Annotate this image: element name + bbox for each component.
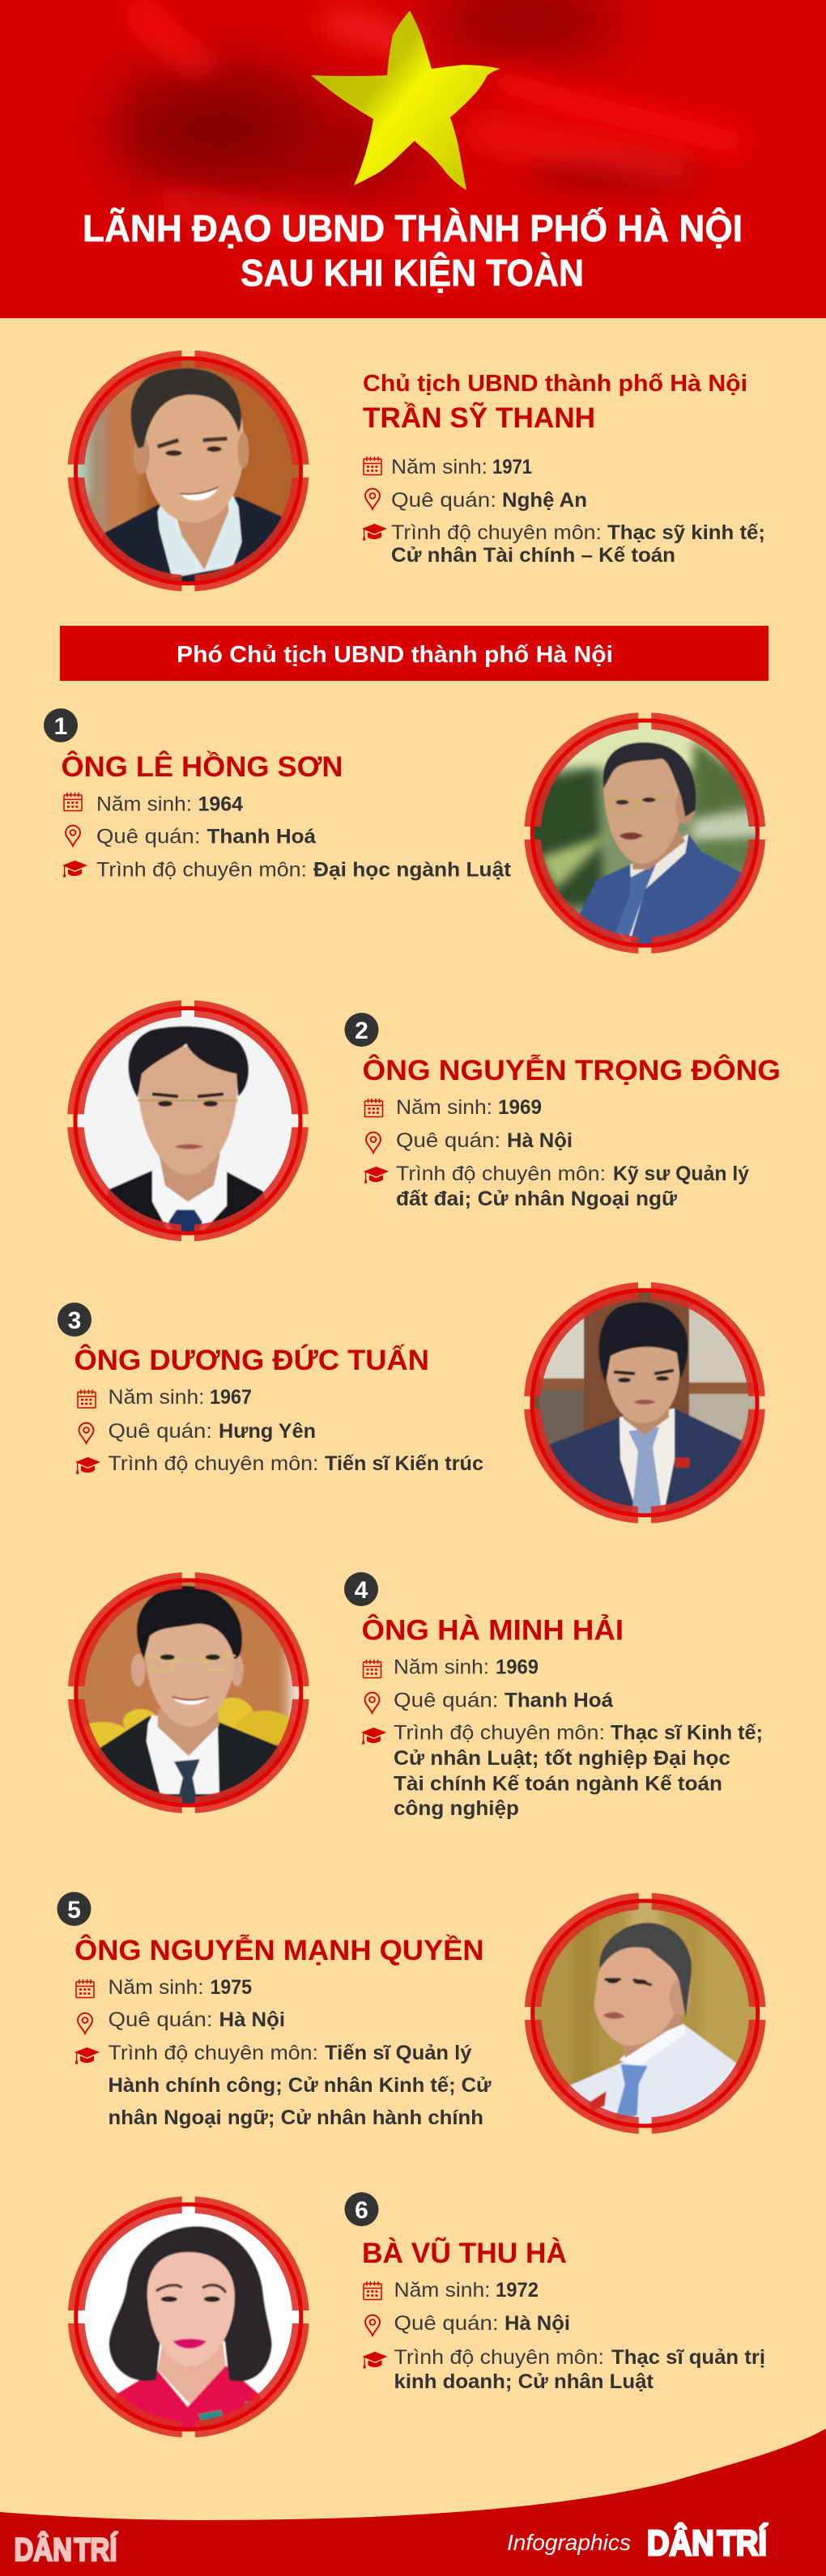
birth year row 1: Năm sinh:: [96, 793, 192, 816]
birth year row: 1971: [492, 456, 532, 478]
birth year row 4: Năm sinh:: [394, 1656, 489, 1679]
birth year row 2: [364, 1096, 542, 1119]
education row 5: nhân Ngoại ngữ; Cử nhân hành chính: [109, 2106, 483, 2129]
hometown row 1: [66, 826, 316, 848]
birth year row 3: [78, 1386, 252, 1409]
number badge 1: [44, 708, 78, 742]
hometown row 5: Quê quán:: [109, 2009, 212, 2031]
chairman portrait: [66, 350, 309, 593]
name 4: ÔNG HÀ MINH HẢI: [361, 1614, 624, 1647]
portrait 6: [67, 2196, 310, 2438]
number badge 6: [345, 2192, 379, 2226]
icon: calendar: [364, 2281, 381, 2299]
education row 2: Trình độ chuyên môn:: [396, 1163, 606, 1185]
icon: calendar: [364, 457, 381, 474]
portrait ring: [75, 1008, 300, 1233]
birth year row 6: [364, 2279, 539, 2302]
vice chairman 2: [66, 999, 781, 1242]
number badge 5: [57, 1892, 91, 1926]
birth year row 4: 1969: [496, 1656, 539, 1679]
hometown row 5: [78, 2009, 285, 2034]
icon: calendar: [64, 793, 82, 811]
hometown row 1: Quê quán:: [96, 826, 201, 848]
birth year row: Năm sinh:: [391, 456, 488, 478]
hometown row 4: Thanh Hoá: [505, 1689, 613, 1711]
education row 5: Hành chính công; Cử nhân Kinh tế; Cử: [109, 2074, 492, 2097]
hometown row 3: Hưng Yên: [219, 1420, 316, 1443]
icon: location pin: [364, 1693, 379, 1713]
education row 2: đất đai; Cử nhân Ngoại ngữ: [396, 1188, 678, 1210]
portrait 2: [66, 999, 309, 1242]
chairman title: Chủ tịch UBND thành phố Hà Nội: [363, 371, 747, 397]
number badge 6: 6: [355, 2197, 368, 2224]
icon: yellow star: [311, 11, 500, 190]
birth year row 6: 1972: [496, 2279, 539, 2302]
birth year row 3: 1967: [210, 1386, 252, 1409]
education row 3: Tiến sĩ Kiến trúc: [325, 1452, 483, 1475]
hometown row 4: Quê quán:: [394, 1689, 499, 1711]
birth year row 2: Năm sinh:: [396, 1096, 492, 1119]
portrait ring: [532, 721, 757, 946]
number badge 3: 3: [68, 1307, 81, 1334]
chairman profile: [66, 350, 765, 593]
hometown row 2: Quê quán:: [396, 1129, 500, 1152]
portrait ring: [76, 2204, 301, 2429]
hometown row 6: [365, 2312, 570, 2336]
hometown row 1: Thanh Hoá: [207, 826, 316, 848]
birth year row 5: [76, 1976, 252, 1999]
name 5: ÔNG NGUYỄN MẠNH QUYỀN: [75, 1934, 484, 1966]
section banner: vice chairmen: Phó Chủ tịch UBND thành phố Hà Nội: [177, 642, 613, 668]
icon: calendar: [363, 1660, 381, 1677]
education row 6: Thạc sĩ quản trị: [611, 2346, 765, 2369]
hometown row: Nghệ An: [502, 489, 587, 512]
education row 4: [361, 1721, 763, 1820]
birth year row 5: Năm sinh:: [109, 1976, 204, 1999]
name 2: ÔNG NGUYỄN TRỌNG ĐÔNG: [363, 1054, 781, 1086]
birth year row 4: [363, 1656, 539, 1679]
icon: graduation cap: [62, 861, 87, 878]
education row 5: Tiến sĩ Quản lý: [325, 2042, 472, 2064]
icon: graduation cap: [361, 1728, 386, 1744]
education row 4: Tài chính Kế toán ngành Kế toán: [394, 1773, 722, 1796]
education row 6: kinh doanh; Cử nhân Luật: [394, 2370, 654, 2393]
title: SAU KHI KIỆN TOÀN: [241, 252, 584, 294]
icon: location pin: [66, 826, 80, 846]
number badge 4: 4: [355, 1577, 368, 1604]
chairman name: TRẦN SỸ THANH: [363, 402, 595, 434]
header banner: waving flag: [0, 0, 826, 318]
education row 2: [364, 1163, 749, 1210]
education row 3: Trình độ chuyên môn:: [109, 1452, 319, 1475]
icon: calendar: [78, 1389, 96, 1408]
logo: Dan Tri watermark: DÂN TRÍ: [15, 2531, 117, 2568]
portrait 5: [524, 1892, 767, 2135]
hometown row: [365, 489, 587, 512]
education row 4: Cử nhân Luật; tốt nghiệp Đại học: [394, 1747, 730, 1770]
vice chairman 3: [57, 1282, 766, 1524]
education row 5: [75, 2042, 492, 2129]
birth year row 2: 1969: [498, 1096, 542, 1119]
vice chairman 5: [57, 1892, 767, 2135]
birth year row 1: [64, 793, 243, 816]
education row 1: Đại học ngành Luật: [313, 858, 512, 881]
education row 5: Trình độ chuyên môn:: [109, 2042, 318, 2064]
hometown row 3: [79, 1420, 316, 1443]
footer band: [0, 2429, 826, 2576]
icon: graduation cap: [364, 1167, 389, 1184]
education row: [362, 521, 765, 567]
portrait 4: [67, 1571, 312, 1814]
icon: graduation cap: [75, 2047, 100, 2064]
icon: calendar: [76, 1979, 94, 1998]
number badge 3: [57, 1303, 92, 1337]
icon: location pin: [365, 2315, 380, 2336]
logo: Dan Tri: DÂN TRÍ: [647, 2523, 769, 2563]
education row 4: Thạc sĩ Kinh tế;: [611, 1721, 763, 1744]
birth year row 5: 1975: [211, 1976, 252, 1999]
icon: calendar: [364, 1099, 382, 1117]
education row 1: Trình độ chuyên môn:: [96, 858, 307, 881]
number badge 2: [345, 1013, 379, 1047]
birth year row 3: Năm sinh:: [109, 1386, 204, 1409]
name 3: ÔNG DƯƠNG ĐỨC TUẤN: [75, 1344, 429, 1376]
footer label: Infographics: Infographics: [507, 2530, 631, 2555]
icon: graduation cap: [362, 524, 387, 541]
hometown row 4: [364, 1689, 613, 1713]
title: LÃNH ĐẠO UBND THÀNH PHỐ HÀ NỘI: [83, 207, 743, 249]
birth year row: [364, 456, 532, 478]
hometown row 5: Hà Nội: [219, 2009, 285, 2031]
number badge 2: 2: [355, 1018, 368, 1044]
education row 2: Kỹ sư Quản lý: [613, 1163, 749, 1185]
education row 6: Trình độ chuyên môn:: [394, 2346, 604, 2369]
hometown row 3: Quê quán:: [109, 1420, 212, 1443]
education row 4: công nghiệp: [394, 1797, 519, 1820]
number badge 5: 5: [67, 1897, 81, 1923]
education row 4: Trình độ chuyên môn:: [394, 1721, 605, 1744]
birth year row 6: Năm sinh:: [394, 2279, 491, 2302]
vice chairman 6: [67, 2192, 765, 2438]
name 1: ÔNG LÊ HỒNG SƠN: [62, 750, 343, 783]
hometown row 2: Hà Nội: [507, 1129, 573, 1152]
hometown row 6: Hà Nội: [505, 2312, 570, 2335]
education row 3: [75, 1452, 483, 1475]
icon: graduation cap: [75, 1457, 100, 1473]
portrait 1: [523, 712, 766, 954]
portrait ring: [76, 1580, 301, 1805]
icon: location pin: [365, 489, 380, 509]
birth year row 1: 1964: [198, 793, 243, 816]
icon: graduation cap: [363, 2352, 387, 2369]
portrait ring: [533, 1901, 758, 2126]
portrait ring: [76, 359, 301, 584]
portrait 3: [523, 1282, 766, 1524]
vice chairman 1: [44, 708, 766, 954]
education row 1: [62, 858, 512, 881]
education row: Cử nhân Tài chính – Kế toán: [391, 544, 675, 567]
vice chairman 4: [67, 1571, 763, 1820]
number badge 1: 1: [54, 713, 67, 740]
hometown row: Quê quán:: [391, 489, 496, 512]
education row: Trình độ chuyên môn:: [391, 521, 602, 544]
education row: Thạc sỹ kinh tế;: [607, 521, 765, 544]
hometown row 2: [366, 1129, 573, 1153]
number badge 4: [344, 1572, 378, 1606]
education row 6: [363, 2346, 765, 2393]
title: [83, 207, 743, 294]
hometown row 6: Quê quán:: [394, 2312, 499, 2335]
section banner: vice chairmen: [60, 626, 769, 681]
icon: location pin: [79, 1423, 94, 1443]
icon: location pin: [78, 2013, 92, 2034]
icon: location pin: [366, 1133, 381, 1153]
portrait ring: [532, 1290, 757, 1515]
name 6: BÀ VŨ THU HÀ: [362, 2237, 567, 2269]
